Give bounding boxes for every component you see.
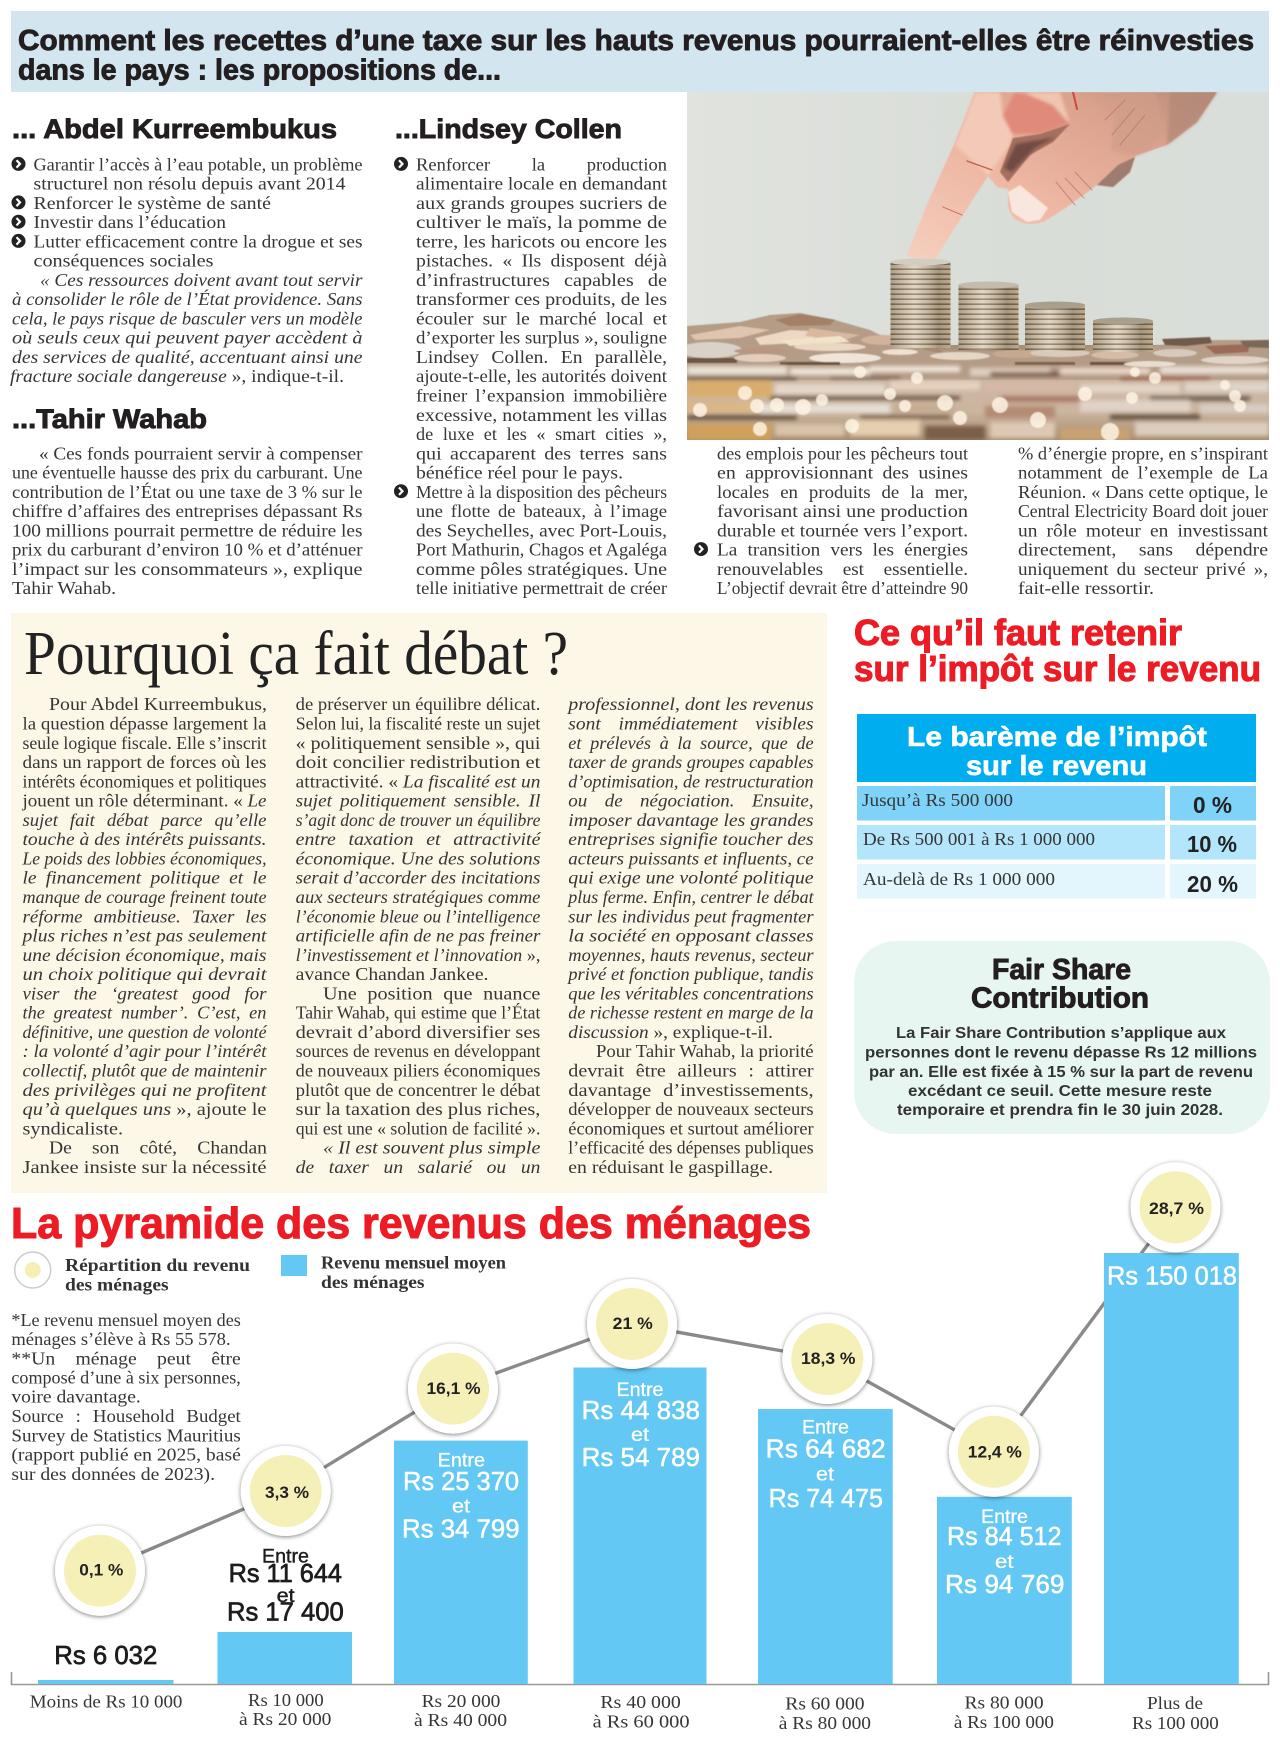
text column 2: « politiquement sensible », qui bbox=[296, 733, 540, 753]
text block: propositions Lindsey Collen: d’exporter les surplus », souligne bbox=[416, 328, 667, 348]
text block: proposition Tahir Wahab: chiffre d’affaires des entreprises dépassant Rs bbox=[12, 501, 362, 521]
bar: plus de Rs 100 000: Plus de bbox=[1147, 1693, 1203, 1713]
notes and source: composé d’une à six personnes, bbox=[11, 1368, 241, 1388]
text column 2: qui est une « solution de facilité ». bbox=[296, 1118, 540, 1138]
text block: propositions Lindsey Collen: un rôle moteur en investissant bbox=[1018, 520, 1268, 540]
text column 3: professionnel, dont les revenus bbox=[566, 694, 814, 714]
text column 3: et prélevés à la source, que de bbox=[568, 733, 814, 753]
panel: Fair Share Contribution: temporaire et prendra fin le 30 juin 2028. bbox=[897, 1102, 1223, 1119]
text block: propositions Lindsey Collen: uniquement du secteur privé », bbox=[1018, 559, 1268, 579]
text block: propositions Abdel Kurreembukus: Investir dans l’éducation bbox=[34, 212, 226, 232]
text column 1: collectif, plutôt que de maintenir bbox=[22, 1060, 268, 1080]
text column 3: privé et fonction publique, tandis bbox=[566, 964, 814, 984]
table header: sur le revenu bbox=[966, 750, 1147, 781]
text block: propositions Abdel Kurreembukus: conséquences sociales bbox=[34, 251, 214, 271]
circle: 3,3 %: 3,3 % bbox=[265, 1483, 309, 1502]
text column 1: une décision économique, mais bbox=[22, 945, 266, 965]
text block: propositions Abdel Kurreembukus: « Ces ressources doivent avant tout servir bbox=[40, 270, 364, 290]
bar: Rs 40 000 à Rs 60 000: à Rs 60 000 bbox=[593, 1712, 690, 1732]
bar: Rs 10 000 à Rs 20 000: et bbox=[277, 1586, 296, 1607]
notes and source bbox=[11, 1310, 241, 1485]
row: 10 % bbox=[857, 825, 1256, 860]
text block: propositions Abdel Kurreembukus: Garantir l’accès à l’eau potable, un problème bbox=[34, 154, 363, 174]
text block: propositions Lindsey Collen bbox=[394, 154, 1268, 598]
legend: répartition du revenu: Répartition du revenu bbox=[65, 1255, 250, 1275]
text column 3: moyennes, hauts revenus, secteur bbox=[568, 945, 815, 965]
title band: dans le pays : les propositions de... bbox=[18, 54, 501, 86]
text column 1: seule logique fiscale. Elle s’inscrit bbox=[22, 733, 266, 753]
text column 3: sur les individus peut fragmenter bbox=[568, 906, 815, 926]
text column 1: des privilèges qui ne profitent bbox=[22, 1080, 268, 1100]
text block: propositions Abdel Kurreembukus: Renforcer le système de santé bbox=[34, 193, 271, 213]
text block: propositions Lindsey Collen: ajoute-t-elle, les autorités doivent bbox=[416, 366, 667, 386]
bar: Rs 10 000 à Rs 20 000: à Rs 20 000 bbox=[239, 1709, 331, 1729]
text column 1: viser the ‘greatest good for bbox=[22, 983, 268, 1003]
bar: Rs 40 000 à Rs 60 000: Entre bbox=[616, 1380, 664, 1401]
text block: propositions Lindsey Collen: pistaches. « Ils disposent déjà bbox=[416, 251, 667, 271]
text column 1: syndicaliste. bbox=[22, 1118, 123, 1138]
text block: proposition Tahir Wahab: une éventuelle hausse des prix du carburant. Une bbox=[12, 463, 363, 483]
photo: hand stacking coins bbox=[678, 92, 1269, 441]
title band bbox=[11, 11, 1269, 92]
text column 1: la question dépasse largement la bbox=[22, 714, 267, 734]
text block: propositions Lindsey Collen: Mettre à la disposition des pêcheurs bbox=[416, 482, 667, 502]
bar: Rs 20 000 à Rs 40 000: Rs 34 799 bbox=[402, 1514, 520, 1544]
bar: plus de Rs 100 000: Rs 100 000 bbox=[1132, 1713, 1219, 1733]
text column 2: devrait d’abord diversifier ses bbox=[296, 1022, 540, 1042]
row: 0 %: Jusqu’à Rs 500 000 bbox=[862, 790, 1013, 810]
bar: moins de Rs 10 000: Moins de Rs 10 000 bbox=[30, 1692, 182, 1712]
heading: Pourquoi ça fait débat: Pourquoi ça fait débat ? bbox=[24, 620, 568, 688]
bar: Rs 40 000 à Rs 60 000: Rs 40 000 bbox=[600, 1692, 681, 1712]
text column 1: intérêts économiques et politiques bbox=[22, 771, 266, 791]
bar: Rs 20 000 à Rs 40 000: Rs 20 000 bbox=[422, 1691, 500, 1711]
text column 3: sont immédiatement visibles bbox=[568, 714, 814, 734]
bar: Rs 60 000 à Rs 80 000: et bbox=[816, 1464, 835, 1485]
table: barème de l'impôt bbox=[857, 714, 1256, 898]
circle: 16,1 % bbox=[408, 1344, 498, 1434]
circle: 3,3 % bbox=[241, 1446, 331, 1536]
notes and source: **Un ménage peut être bbox=[11, 1348, 241, 1368]
text block: propositions Lindsey Collen: durable et tournée vers l’export. bbox=[717, 520, 968, 540]
text column 3: entreprises signifie toucher des bbox=[568, 829, 814, 849]
text column 1: De son côté, Chandan bbox=[49, 1138, 267, 1158]
circle: 18,3 % bbox=[782, 1314, 872, 1404]
text block: propositions Lindsey Collen: transformer ces produits, de les bbox=[416, 289, 667, 309]
text block: propositions Abdel Kurreembukus: cela, le pays risque de basculer vers un modèle bbox=[12, 308, 362, 328]
text column 1: the greatest number’. C’est, en bbox=[22, 1003, 266, 1023]
text block: propositions Lindsey Collen: en approvisionnant des usines bbox=[717, 463, 968, 483]
line chart connector bbox=[100, 1207, 1176, 1571]
text block: proposition Tahir Wahab bbox=[12, 443, 363, 598]
text column 3: discussion », explique-t-il. bbox=[568, 1022, 773, 1042]
text block: propositions Lindsey Collen: alimentaire locale en demandant bbox=[416, 174, 667, 194]
text column 2: sur la taxation des plus riches, bbox=[296, 1099, 540, 1119]
text column 1: un choix politique qui devrait bbox=[22, 964, 268, 984]
text column 3: de richesse restent en marge de la bbox=[568, 1003, 814, 1023]
text block: propositions Lindsey Collen: favorisant ainsi une production bbox=[717, 501, 968, 521]
text block: proposition Tahir Wahab: « Ces fonds pourraient servir à compenser bbox=[39, 443, 362, 463]
circle: 28,7 %: 28,7 % bbox=[1149, 1199, 1204, 1218]
table header: Le barème de l’impôt bbox=[907, 721, 1207, 752]
bar: Rs 80 000 à Rs 100 000: Rs 94 769 bbox=[945, 1569, 1064, 1599]
heading: Abdel Kurreembukus: ... Abdel Kurreembukus bbox=[12, 114, 337, 144]
text column 2: doit concilier redistribution et bbox=[296, 752, 540, 772]
text column 2: Une position que nuance bbox=[323, 983, 540, 1003]
bar: Rs 80 000 à Rs 100 000: Rs 80 000 bbox=[964, 1693, 1044, 1713]
notes and source: ménages s’élève à Rs 55 578. bbox=[11, 1329, 231, 1349]
axis bbox=[12, 1672, 1268, 1684]
text column 2: entre taxation et attractivité bbox=[296, 829, 542, 849]
text block: propositions Lindsey Collen: renouvelables est essentielle. bbox=[717, 559, 968, 579]
text column 1: : la volonté d’agir pour l’intérêt bbox=[22, 1041, 268, 1061]
panel: Fair Share Contribution: Contribution bbox=[971, 983, 1149, 1015]
panel: Fair Share Contribution: personnes dont le revenu dépasse Rs 12 millions bbox=[865, 1044, 1257, 1062]
text column 2: économique. Une des solutions bbox=[296, 848, 540, 868]
text column 2: attractivité. « La fiscalité est un bbox=[296, 771, 540, 791]
text column 3: l’efficacité des dépenses publiques bbox=[568, 1138, 814, 1158]
bar: Rs 80 000 à Rs 100 000: à Rs 100 000 bbox=[954, 1712, 1054, 1732]
text block: propositions Lindsey Collen: telle initiative permettrait de créer bbox=[416, 578, 667, 598]
coin stacks bbox=[890, 258, 1153, 352]
bar: Rs 20 000 à Rs 40 000 bbox=[394, 1441, 528, 1730]
text column 1: jouent un rôle déterminant. « Le bbox=[21, 791, 267, 811]
panel: Fair Share Contribution: Fair Share bbox=[992, 954, 1131, 986]
text block: propositions Lindsey Collen: L’objectif devrait être d’atteindre 90 bbox=[717, 578, 968, 598]
circle: 16,1 %: 16,1 % bbox=[426, 1379, 480, 1398]
text block: propositions Lindsey Collen: des Seychelles, avec Port-Louis, bbox=[416, 520, 667, 540]
bar: plus de Rs 100 000 bbox=[1104, 1253, 1239, 1733]
title band: Comment les recettes d’une taxe sur les hauts revenus pourraient-elles être réinvesties bbox=[18, 25, 1254, 57]
text block: propositions Lindsey Collen: freiner l’expansion immobilière bbox=[416, 385, 667, 405]
text column 1: manque de courage freinent toute bbox=[22, 887, 266, 907]
text column 2: serait d’accorder des incitations bbox=[296, 868, 540, 888]
text block: proposition Tahir Wahab: Tahir Wahab. bbox=[12, 578, 116, 598]
bar: Rs 20 000 à Rs 40 000: à Rs 40 000 bbox=[414, 1710, 507, 1730]
text column 2: aux secteurs stratégiques comme bbox=[296, 887, 540, 907]
text column 1: définitive, une question de volonté bbox=[22, 1022, 267, 1042]
text column 3: que les véritables concentrations bbox=[568, 983, 814, 1003]
text block: proposition Tahir Wahab: contribution de l’État ou une taxe de 3 % sur le bbox=[12, 481, 363, 502]
text column 2: l’économie bleue ou l’intelligence bbox=[296, 906, 540, 926]
bar: Rs 10 000 à Rs 20 000: Rs 10 000 bbox=[248, 1690, 324, 1710]
bar: Rs 10 000 à Rs 20 000: Rs 11 644 bbox=[229, 1558, 342, 1588]
bar: Rs 20 000 à Rs 40 000: Rs 25 370 bbox=[403, 1466, 519, 1496]
bar: Rs 40 000 à Rs 60 000 bbox=[574, 1368, 706, 1732]
bar: plus de Rs 100 000: Rs 150 018 bbox=[1107, 1260, 1237, 1290]
text block: propositions Lindsey Collen: cultiver le maïs, la pomme de bbox=[416, 212, 667, 232]
bar: Rs 10 000 à Rs 20 000: Rs 17 400 bbox=[227, 1597, 344, 1627]
circle: 0,1 %: 0,1 % bbox=[79, 1560, 123, 1580]
legend: revenu mensuel moyen: Revenu mensuel moyen bbox=[321, 1252, 506, 1272]
text column 2: de préserver un équilibre délicat. bbox=[296, 694, 540, 714]
text column 3 bbox=[566, 694, 815, 1177]
panel: Fair Share Contribution: excédant ce seuil. Cette mesure reste bbox=[908, 1083, 1212, 1100]
text column 2: avance Chandan Jankee. bbox=[296, 964, 489, 984]
row: 0 %: 0 % bbox=[1193, 792, 1232, 818]
text block: propositions Abdel Kurreembukus: où seuls ceux qui peuvent payer accèdent à bbox=[12, 328, 362, 348]
text block: propositions Lindsey Collen: qui accaparent des terres sans bbox=[416, 443, 667, 463]
text column 1: Le poids des lobbies économiques, bbox=[22, 848, 266, 868]
text column 2: « Il est souvent plus simple bbox=[323, 1138, 540, 1158]
legend: revenu mensuel moyen bbox=[281, 1252, 506, 1292]
text column 2: l’investissement et l’innovation », bbox=[296, 945, 540, 965]
heading: Ce qu'il faut retenir: sur l’impôt sur le revenu bbox=[854, 648, 1261, 689]
text block: propositions Lindsey Collen: % d’énergie propre, en s’inspirant bbox=[1018, 443, 1268, 463]
row: 20 % bbox=[857, 864, 1256, 898]
bar: moins de Rs 10 000 bbox=[30, 1640, 182, 1712]
bar: Rs 60 000 à Rs 80 000: Entre bbox=[802, 1417, 849, 1438]
bar: Rs 60 000 à Rs 80 000: Rs 60 000 bbox=[785, 1693, 864, 1713]
text block: propositions Lindsey Collen: Renforcer la production bbox=[416, 154, 667, 174]
bar: Rs 80 000 à Rs 100 000 bbox=[937, 1497, 1072, 1732]
heading: Lindsey Collen: ...Lindsey Collen bbox=[395, 114, 622, 144]
text block: propositions Abdel Kurreembukus: des services de qualité, accentuant ainsi une bbox=[12, 347, 363, 367]
table header bbox=[857, 714, 1256, 782]
text block: propositions Lindsey Collen: d’infrastructures capables de bbox=[416, 270, 667, 290]
text column 3: en réduisant le gaspillage. bbox=[568, 1157, 773, 1177]
text block: proposition Tahir Wahab: 100 millions pourrait permettre de réduire les bbox=[12, 520, 363, 540]
bar: Rs 20 000 à Rs 40 000: et bbox=[452, 1497, 471, 1518]
text column 3: Pour Tahir Wahab, la priorité bbox=[596, 1041, 814, 1061]
legend: répartition du revenu: des ménages bbox=[65, 1274, 169, 1294]
circle: 12,4 % bbox=[949, 1407, 1039, 1497]
text column 3: d’optimisation, de restructuration bbox=[568, 771, 814, 791]
bar: Rs 80 000 à Rs 100 000: Rs 84 512 bbox=[947, 1521, 1062, 1551]
notes and source: *Le revenu mensuel moyen des bbox=[11, 1310, 241, 1330]
text column 3: ou de négociation. Ensuite, bbox=[568, 791, 814, 811]
bar: Rs 20 000 à Rs 40 000: Entre bbox=[438, 1450, 485, 1471]
text block: propositions Lindsey Collen: directement, sans dépendre bbox=[1018, 540, 1268, 560]
text block: propositions Lindsey Collen: comme pôles stratégiques. Une bbox=[416, 559, 667, 579]
text block: propositions Lindsey Collen: Central Electricity Board doit jouer bbox=[1018, 501, 1268, 521]
text column 2: de taxer un salarié ou un bbox=[296, 1157, 540, 1177]
panel: Fair Share Contribution: La Fair Share Contribution s’applique aux bbox=[896, 1025, 1226, 1042]
text column 1: le financement politique et le bbox=[22, 868, 267, 888]
text column 3: économiques et surtout améliorer bbox=[568, 1118, 814, 1138]
text column 3: imposer davantage les grandes bbox=[568, 810, 814, 830]
text column 2: Selon lui, la fiscalité reste un sujet bbox=[296, 714, 540, 734]
notes and source: sur des données de 2023). bbox=[11, 1464, 215, 1485]
notes and source: Source : Household Budget bbox=[11, 1406, 241, 1426]
text block: propositions Lindsey Collen: bénéfice réel pour le pays. bbox=[416, 463, 623, 483]
text column 3: plus ferme. Enfin, centrer le débat bbox=[566, 887, 815, 907]
text block: propositions Lindsey Collen: aux grands groupes sucriers de bbox=[416, 193, 667, 213]
row: 20 %: 20 % bbox=[1187, 871, 1238, 897]
circle: 21 % bbox=[587, 1279, 677, 1369]
text block: propositions Abdel Kurreembukus: fracture sociale dangereuse », indique-t-il. bbox=[10, 366, 344, 386]
text block: propositions Lindsey Collen: des emplois pour les pêcheurs tout bbox=[717, 443, 968, 463]
text column 2: Tahir Wahab, qui estime que l’État bbox=[296, 1002, 540, 1023]
bar: Rs 40 000 à Rs 60 000: Rs 44 838 bbox=[582, 1395, 700, 1425]
circle: 28,7 % bbox=[1130, 1162, 1220, 1252]
text column 3: la société en opposant classes bbox=[568, 926, 814, 946]
panel: Fair Share Contribution: par an. Elle est fixée à 15 % sur la part de revenu bbox=[869, 1064, 1253, 1081]
bar: Rs 60 000 à Rs 80 000: Rs 74 475 bbox=[769, 1483, 883, 1513]
row: 10 %: 10 % bbox=[1187, 831, 1237, 857]
text block: propositions Lindsey Collen: terre, les haricots ou encore les bbox=[416, 231, 667, 251]
text block: propositions Lindsey Collen: excessive, notamment les villas bbox=[416, 405, 667, 425]
row: 0 % bbox=[857, 786, 1256, 820]
text block: propositions Abdel Kurreembukus: à consolider le rôle de l’État providence. Sans bbox=[12, 288, 362, 309]
text block: proposition Tahir Wahab: l’impact sur les consommateurs », explique bbox=[12, 559, 362, 579]
text block: propositions Lindsey Collen: une flotte de bateaux, à l’image bbox=[416, 501, 667, 521]
heading: Ce qu'il faut retenir: Ce qu’il faut retenir bbox=[854, 612, 1182, 653]
text column 3: développer de nouveaux secteurs bbox=[568, 1099, 814, 1119]
hand bbox=[907, 92, 1217, 259]
row: 10 %: De Rs 500 001 à Rs 1 000 000 bbox=[863, 829, 1095, 849]
text column 3: qui exige une volonté politique bbox=[568, 868, 814, 888]
notes and source: Survey de Statistics Mauritius bbox=[11, 1425, 241, 1445]
bar: Rs 80 000 à Rs 100 000: et bbox=[995, 1552, 1014, 1573]
text column 3: davantage d’investissements, bbox=[568, 1080, 814, 1100]
text column 1: réforme ambitieuse. Taxer les bbox=[22, 906, 266, 926]
text column 1: touche à des intérêts puissants. bbox=[22, 829, 266, 849]
bar: Rs 40 000 à Rs 60 000: Rs 54 789 bbox=[582, 1442, 700, 1472]
bar: Rs 60 000 à Rs 80 000: à Rs 80 000 bbox=[779, 1713, 871, 1733]
text column 2: plutôt que de concentrer le débat bbox=[296, 1080, 540, 1100]
circle: 0,1 % bbox=[55, 1526, 145, 1616]
text block: propositions Lindsey Collen: fait-elle ressortir. bbox=[1018, 578, 1154, 598]
text column 2: sources de revenus en développant bbox=[296, 1041, 540, 1061]
circle: 12,4 %: 12,4 % bbox=[968, 1442, 1022, 1462]
text block: propositions Lindsey Collen: notamment de l’exemple de La bbox=[1018, 463, 1268, 483]
text column 2: s’agit donc de trouver un équilibre bbox=[296, 810, 540, 830]
heading: Tahir Wahab: ...Tahir Wahab bbox=[12, 404, 207, 434]
legend: revenu mensuel moyen: des ménages bbox=[321, 1272, 424, 1292]
notes and source: (rapport publié en 2025, basé bbox=[11, 1445, 241, 1466]
text column 3: devrait être ailleurs : attirer bbox=[568, 1060, 814, 1080]
text block: proposition Tahir Wahab: prix du carburant d’environ 10 % et d’atténuer bbox=[12, 540, 363, 560]
bar: Rs 80 000 à Rs 100 000: Entre bbox=[981, 1507, 1028, 1528]
text column 2: sujet politiquement sensible. Il bbox=[296, 791, 540, 811]
bar: moins de Rs 10 000: Rs 6 032 bbox=[54, 1640, 157, 1670]
text column 3: taxer de grands groupes capables bbox=[568, 752, 814, 772]
bar: Rs 10 000 à Rs 20 000: Entre bbox=[262, 1546, 309, 1568]
text block: propositions Lindsey Collen: Port Mathurin, Chagos et Agaléga bbox=[416, 540, 667, 560]
text block: propositions Lindsey Collen: La transition vers les énergies bbox=[717, 540, 968, 560]
heading: La pyramide des revenus des ménages: La pyramide des revenus des ménages bbox=[11, 1199, 811, 1248]
circle: 18,3 %: 18,3 % bbox=[801, 1349, 856, 1368]
heading: Ce qu'il faut retenir bbox=[854, 612, 1261, 689]
bar: Rs 10 000 à Rs 20 000 bbox=[218, 1546, 352, 1729]
text column 2: artificielle afin de ne pas freiner bbox=[296, 926, 541, 946]
text column 2 bbox=[296, 694, 542, 1177]
panel: pourquoi ça fait débat bbox=[11, 613, 827, 1193]
text column 3: acteurs puissants et influents, ce bbox=[568, 848, 814, 868]
text column 1: dans un rapport de forces où les bbox=[22, 752, 266, 772]
text block: propositions Abdel Kurreembukus bbox=[10, 154, 364, 386]
text column 1 bbox=[20, 694, 268, 1177]
text column 1: Jankee insiste sur la nécessité bbox=[22, 1157, 267, 1177]
text column 1: qu’à quelques uns », ajoute le bbox=[22, 1099, 266, 1119]
bar: Rs 60 000 à Rs 80 000 bbox=[758, 1409, 893, 1733]
panel: Fair Share Contribution bbox=[854, 941, 1270, 1134]
circle: 21 %: 21 % bbox=[613, 1314, 653, 1333]
text block: propositions Lindsey Collen: Lindsey Collen. En parallèle, bbox=[416, 347, 667, 367]
notes and source: voire davantage. bbox=[11, 1386, 141, 1406]
text column 1: plus riches n’est pas seulement bbox=[20, 926, 268, 946]
bar: Rs 60 000 à Rs 80 000: Rs 64 682 bbox=[766, 1434, 886, 1464]
bar chart bbox=[12, 1253, 1268, 1733]
row: 20 %: Au-delà de Rs 1 000 000 bbox=[863, 869, 1055, 889]
text column 1: sujet fait débat parce qu’elle bbox=[22, 810, 267, 830]
text block: propositions Abdel Kurreembukus: Lutter efficacement contre la drogue et ses bbox=[34, 231, 362, 251]
text block: propositions Lindsey Collen: de luxe et les « smart cities », bbox=[416, 424, 667, 444]
text block: propositions Abdel Kurreembukus: structurel non résolu depuis avant 2014 bbox=[34, 174, 346, 194]
text block: propositions Lindsey Collen: Réunion. « Dans cette optique, le bbox=[1018, 482, 1268, 502]
legend: répartition du revenu bbox=[15, 1252, 250, 1294]
text block: propositions Lindsey Collen: locales en produits de la mer, bbox=[717, 482, 968, 502]
text block: propositions Lindsey Collen: écouler sur le marché local et bbox=[416, 308, 667, 328]
bar: Rs 40 000 à Rs 60 000: et bbox=[631, 1425, 650, 1446]
text column 1: Pour Abdel Kurreembukus, bbox=[49, 694, 267, 714]
text column 2: de nouveaux piliers économiques bbox=[296, 1060, 540, 1080]
